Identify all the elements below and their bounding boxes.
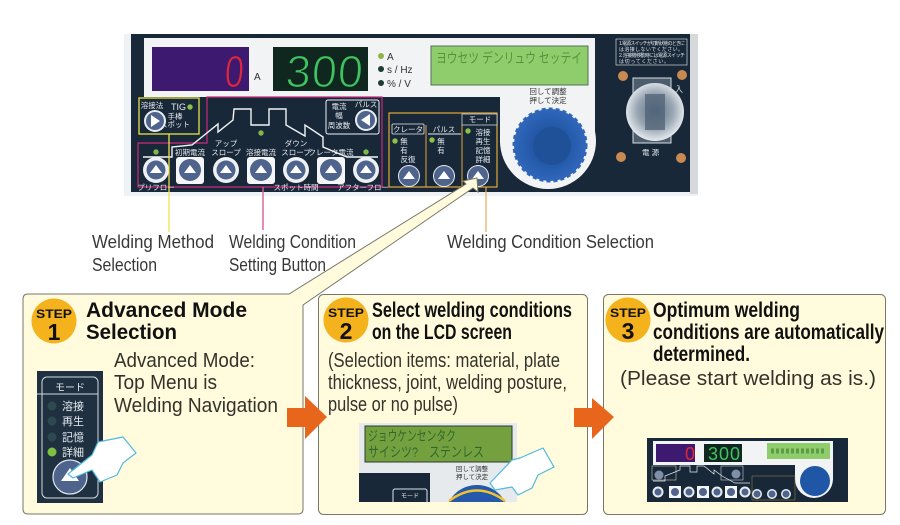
adjustment knob: 押して決定 <box>529 95 567 105</box>
mode button closeup: 再生 <box>62 414 84 428</box>
small panel thumbnail <box>647 438 848 502</box>
power switch: 入 <box>675 85 683 94</box>
green voltage display: 300 <box>284 46 365 97</box>
step 1 description: Advanced Mode: <box>114 350 255 372</box>
label: welding method selection <box>92 232 214 275</box>
welding condition setting group: アフターフロー <box>337 183 389 192</box>
arrow: step 1 to step 2 <box>287 396 327 439</box>
red current display: A <box>254 72 261 83</box>
panel: step 2 <box>318 294 588 525</box>
welding condition selection group: 無 <box>400 136 408 146</box>
welding condition selection group: クレータ <box>393 125 423 134</box>
welding condition setting group: 周波数 <box>328 120 351 130</box>
welding condition setting group: 初期電流 <box>175 147 205 157</box>
label: welding condition setting button <box>229 232 356 275</box>
unit indicators: A <box>387 52 394 63</box>
step 3 description: (Please start welding as is.) <box>620 368 876 390</box>
welding method selection group: スポット <box>160 120 190 129</box>
small panel thumbnail: 300 <box>708 444 740 464</box>
unit indicators <box>378 52 413 90</box>
welding condition setting group: ダウン <box>285 138 307 148</box>
step 1 heading: Advanced Mode <box>86 299 247 322</box>
step 1 description: Top Menu is <box>114 372 217 394</box>
label: welding condition setting button: Welding Condition <box>229 232 356 252</box>
red current display <box>152 46 261 97</box>
label: welding method selection: Welding Method <box>92 232 214 252</box>
step 3 badge: 3 <box>622 318 634 344</box>
welding condition setting group: クレータ電流 <box>308 147 354 157</box>
welding method selection group: TIG <box>171 102 186 112</box>
leader line: welding method <box>168 134 170 232</box>
icon: pointing hand <box>68 437 136 482</box>
LCD closeup: ジョウケンセンタク <box>368 428 456 444</box>
power switch <box>616 34 698 194</box>
welding method selection group: 手棒 <box>168 111 183 121</box>
step 2 badge: STEP <box>328 306 364 320</box>
step 1 badge: STEP <box>36 307 72 321</box>
welding method selection group <box>139 98 199 134</box>
step 1 badge <box>32 298 76 345</box>
step 1 description <box>114 350 278 417</box>
adjustment knob <box>514 86 586 181</box>
power switch: 2. 溶接機移動時には電源スイッチ <box>619 52 685 59</box>
LCD screen <box>431 46 588 85</box>
welding condition setting group: アップ <box>215 139 238 148</box>
red current display: 0 <box>223 46 246 97</box>
leader line: condition setting <box>262 187 264 230</box>
step 2 heading: on the LCD screen <box>372 321 512 344</box>
label: welding condition setting button: Setting Button <box>229 255 326 275</box>
adjustment knob: 回して調整 <box>529 86 567 96</box>
LCD closeup: 押して決定 <box>456 472 489 481</box>
step 2 heading <box>372 299 572 344</box>
label: welding method selection: Selection <box>92 255 157 275</box>
power switch: は溶接しないでください。 <box>619 46 683 53</box>
mode button closeup: モード <box>55 383 85 394</box>
icon: pointing hand on knob <box>490 448 554 495</box>
welding condition selection group: 詳細 <box>476 154 490 164</box>
welding condition selection group: 反復 <box>400 154 416 164</box>
welding condition selection group: 溶接 <box>476 127 491 137</box>
mode button closeup <box>37 371 103 503</box>
mode button closeup: 溶接 <box>62 400 84 413</box>
welder control panel <box>124 34 698 196</box>
welding condition setting group: パルス <box>355 100 377 109</box>
step 2 description: thickness, joint, welding posture, <box>328 372 567 394</box>
power switch: は切ってください。 <box>619 58 669 65</box>
step 3 badge <box>606 298 650 344</box>
small panel thumbnail: 0 <box>685 444 695 464</box>
LCD closeup: サイシツ? ステンレス <box>368 444 484 460</box>
step 2 badge <box>324 298 368 344</box>
unit indicators: s / Hz <box>387 65 413 76</box>
step 3 heading: Optimum welding <box>653 299 800 322</box>
step 2 badge: 2 <box>340 318 352 344</box>
welding condition selection group: 記憶 <box>476 145 491 155</box>
welding condition selection group: パルス <box>433 125 455 134</box>
welding condition selection group: 再生 <box>476 136 491 146</box>
step 3 heading: determined. <box>653 343 750 366</box>
label: welding condition selection: Welding Condition Selection <box>447 232 654 252</box>
welding condition selection group <box>389 113 497 187</box>
mode button closeup: 詳細 <box>62 445 84 459</box>
welding condition selection group: 有 <box>400 145 408 155</box>
LCD screen: ヨウセツ デンリュウ セッテイ <box>436 50 582 66</box>
panel: step 1 with callout arrow <box>23 178 478 514</box>
welding condition setting group: 電流 <box>332 101 347 111</box>
step 1 badge: 1 <box>48 319 61 345</box>
LCD closeup: 回して調整 <box>456 464 489 473</box>
welding condition selection group: モード <box>469 115 491 124</box>
welding condition setting group: スポット時間 <box>274 183 318 192</box>
power switch: 1. 電源スイッチが切断状態のときに <box>619 40 685 47</box>
welding condition selection group: 無 <box>437 136 445 146</box>
mode button closeup: 記憶 <box>62 431 84 444</box>
arrow: step 2 to step 3 <box>574 398 614 439</box>
welding condition setting group <box>137 97 389 192</box>
step 2 description: pulse or no pulse) <box>328 394 458 416</box>
step 1 heading: Selection <box>86 321 177 344</box>
step 1 heading <box>86 299 247 344</box>
unit indicators: % / V <box>387 79 411 90</box>
welding method selection group: 溶接法 <box>141 100 164 110</box>
LCD closeup <box>359 423 517 502</box>
step 3 heading <box>653 299 884 366</box>
welding condition setting group: 幅 <box>335 110 343 120</box>
step 2 description: (Selection items: material, plate <box>328 350 560 372</box>
step 3 badge: STEP <box>610 306 646 320</box>
leader line: condition selection <box>485 187 487 232</box>
welding condition setting group: プリフロー <box>137 183 175 192</box>
power switch: 電 源 <box>642 148 660 157</box>
welding condition selection group: 有 <box>437 145 445 155</box>
step 1 description: Welding Navigation <box>114 395 278 417</box>
welding condition setting group: スロープ <box>281 148 311 157</box>
panel: step 3 <box>604 294 886 514</box>
welding condition setting group: スロープ <box>211 148 241 157</box>
LCD closeup: モード <box>401 493 419 500</box>
step 2 heading: Select welding conditions <box>372 299 572 322</box>
step 2 description <box>328 350 567 416</box>
welding condition setting group: 溶接電流 <box>246 147 276 157</box>
